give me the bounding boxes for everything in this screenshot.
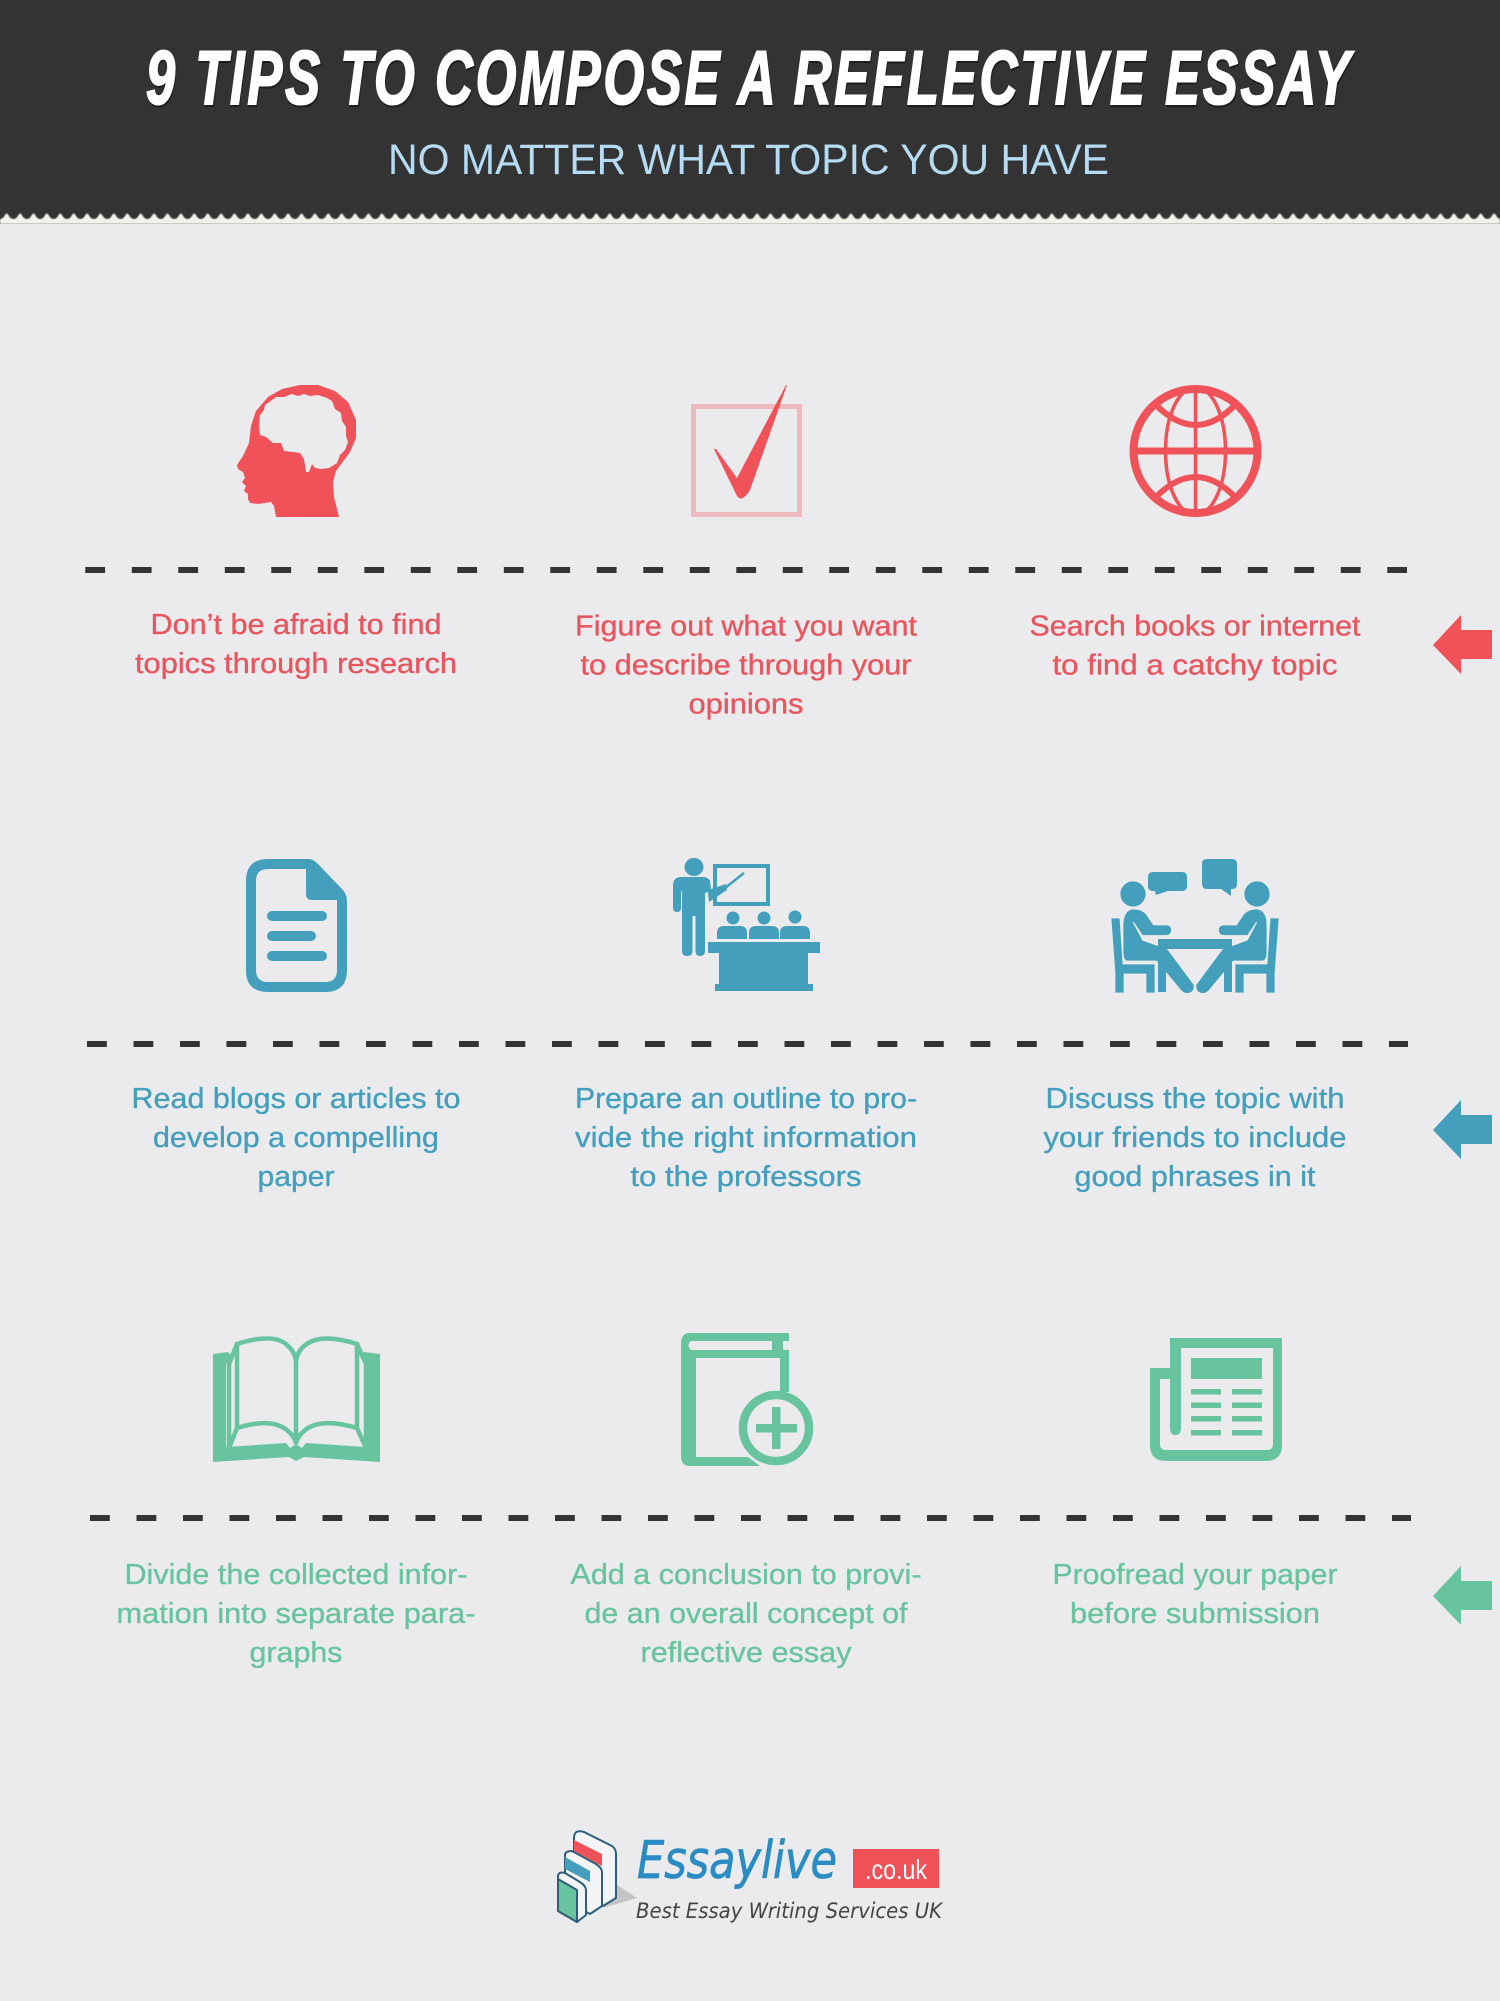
icon: two people talking — [1112, 859, 1278, 992]
header band — [0, 0, 1500, 224]
subtitle: NO MATTER WHAT TOPIC YOU HAVE — [388, 136, 1109, 184]
row 1: red tips — [85, 385, 1492, 720]
tip: describe: Figure out what you want — [575, 610, 917, 642]
tip: divide: Divide the collected infor- — [124, 1559, 468, 1591]
speech bubble left — [1148, 872, 1187, 895]
tip: discuss: good phrases in it — [1074, 1161, 1316, 1193]
tip: read blogs: paper — [258, 1161, 335, 1193]
tip: conclusion — [570, 1559, 922, 1669]
tip: describe: opinions — [688, 688, 804, 720]
tip: conclusion: de an overall concept of — [584, 1598, 908, 1630]
tip: research: Don’t be afraid to find — [150, 609, 442, 641]
logo wordmark: Essaylive — [637, 1831, 837, 1891]
tip: discuss — [1044, 1083, 1346, 1193]
tip: search: Search books or internet — [1030, 610, 1360, 642]
icon: head with brain — [237, 385, 356, 517]
divider line — [85, 567, 1407, 573]
tip: describe: to describe through your — [580, 650, 912, 682]
table — [1158, 939, 1232, 992]
logo domain badge: .co.uk — [865, 1854, 928, 1885]
person right — [1197, 882, 1278, 992]
divider line — [87, 1041, 1408, 1047]
logo icon: stack of books — [558, 1831, 637, 1922]
tip: read blogs — [132, 1083, 460, 1193]
arrow: blue — [1433, 1100, 1492, 1159]
tip: outline: to the professors — [630, 1161, 862, 1193]
logo tagline: Best Essay Writing Services UK — [636, 1899, 944, 1923]
title: 9 TIPS TO COMPOSE A REFLECTIVE ESSAY — [146, 35, 1354, 120]
person left — [1112, 882, 1193, 992]
arrow: red — [1433, 615, 1492, 674]
icon: open book — [213, 1338, 380, 1462]
tip: outline: Prepare an outline to pro- — [575, 1083, 917, 1115]
arrow: green — [1433, 1566, 1492, 1625]
row 3: green tips — [90, 1333, 1492, 1669]
tip: divide: mation into separate para- — [116, 1598, 476, 1630]
tip: research — [135, 609, 457, 680]
tip: divide: graphs — [250, 1637, 342, 1669]
icon: book with plus — [681, 1333, 809, 1466]
icon: check box — [694, 385, 800, 514]
logo domain badge — [853, 1849, 939, 1888]
tip: read blogs: develop a compelling — [153, 1122, 439, 1154]
tip: conclusion: Add a conclusion to provi- — [570, 1559, 922, 1591]
icon: document — [246, 859, 347, 992]
tip: conclusion: reflective essay — [640, 1637, 852, 1669]
logo: Essaylive — [558, 1831, 944, 1923]
tip: search: to find a catchy topic — [1052, 650, 1338, 682]
tip: discuss: Discuss the topic with — [1046, 1083, 1344, 1115]
tip: proofread: Proofread your paper — [1052, 1559, 1338, 1591]
icon: presenter and class — [673, 858, 820, 991]
tip: proofread — [1052, 1559, 1338, 1630]
tip: read blogs: Read blogs or articles to — [132, 1083, 460, 1115]
tip: search — [1030, 610, 1360, 682]
icon: newspaper — [1150, 1338, 1282, 1461]
tip: proofread: before submission — [1070, 1598, 1320, 1630]
speech bubble right — [1202, 859, 1237, 896]
tip: describe — [575, 610, 917, 720]
row 2: blue tips — [87, 858, 1492, 1193]
tip: discuss: your friends to include — [1044, 1122, 1346, 1154]
divider line — [90, 1515, 1411, 1521]
icon: globe — [1132, 387, 1259, 515]
tip: outline: vide the right information — [575, 1122, 917, 1154]
tip: divide — [116, 1559, 476, 1669]
tip: outline — [575, 1083, 917, 1193]
tip: research: topics through research — [135, 648, 457, 680]
